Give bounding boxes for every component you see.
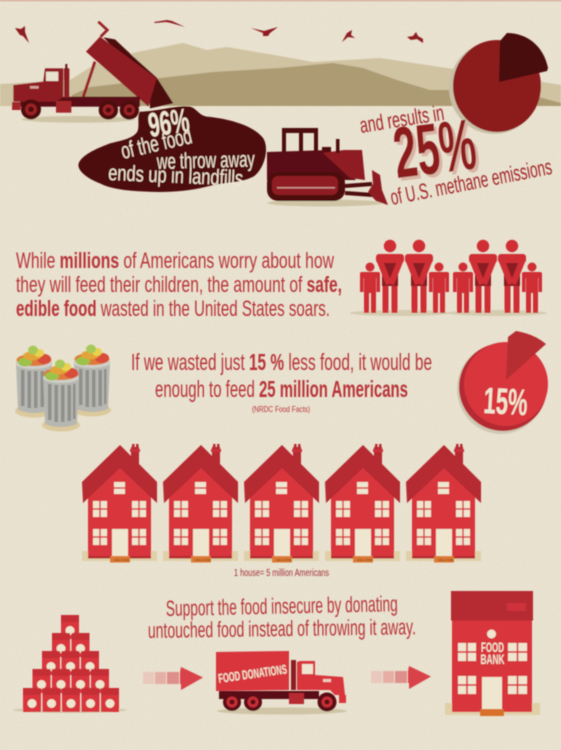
food donations truck: FOOD DONATIONS (217, 661, 288, 686)
support text: Support the food insecure by donating (166, 591, 398, 621)
25 percent methane text: 25% (392, 107, 483, 197)
15 percent pie chart: 15% (483, 380, 529, 423)
paragraph about millions of Americans (16, 248, 342, 321)
arrow to truck (143, 667, 203, 690)
house 1 (82, 444, 157, 562)
five houses (82, 444, 481, 562)
food waste blob with 96 percent text: 96% (146, 102, 192, 145)
25 percent methane text (358, 100, 554, 210)
house legend: 1 house= 5 million Americans (234, 568, 329, 579)
25 percent methane text: and results in (358, 100, 446, 138)
food waste blob with 96 percent text (78, 102, 266, 192)
bulldozer (267, 128, 388, 206)
trash cans with food (15, 344, 111, 432)
house 5 (406, 444, 481, 562)
paragraph about millions of Americans: they will feed their children, the amount of safe, (16, 272, 342, 297)
food bank building: FOOD (481, 639, 504, 655)
food waste blob with 96 percent text: ends up in landfills (108, 160, 244, 191)
support text: untouched food instead of throwing it away. (148, 614, 416, 643)
arrow to food bank (371, 666, 431, 689)
paragraph about millions of Americans: While millions of Americans worry about how (16, 248, 334, 273)
house 2 (163, 444, 238, 562)
food waste blob with 96 percent text: we throw away (156, 146, 255, 174)
food donations truck (216, 651, 347, 714)
pyramid of cans (13, 615, 127, 713)
15 percent statement: (NRDC Food Facts) (252, 404, 310, 414)
15 percent statement: If we wasted just 15 % less food, it would be (131, 349, 432, 375)
25 percent methane text: 25% (389, 104, 480, 194)
food waste blob with 96 percent text: of the food (118, 122, 194, 164)
hills landscape (0, 43, 561, 106)
house 2: WELCOME (195, 558, 211, 562)
dump truck (12, 22, 173, 123)
food bank building: BANK (480, 651, 504, 667)
house 4 (325, 444, 400, 562)
15 percent statement: enough to feed 25 million Americans (155, 376, 408, 402)
house 3 (244, 444, 319, 562)
methane pie chart (449, 33, 548, 134)
paragraph about millions of Americans: edible food wasted in the United States soars. (16, 296, 330, 321)
support text (148, 591, 416, 643)
birds (15, 20, 423, 43)
house 5: WELCOME (438, 558, 454, 562)
house 1: WELCOME (114, 558, 130, 562)
house 3: WELCOME (276, 558, 292, 562)
truck bed (86, 37, 157, 107)
food pouring from truck (103, 37, 173, 108)
15 percent pie chart (457, 331, 548, 434)
15 percent statement (131, 349, 432, 414)
food bank building (445, 591, 540, 716)
people row (350, 240, 547, 316)
house 4: WELCOME (357, 558, 373, 562)
